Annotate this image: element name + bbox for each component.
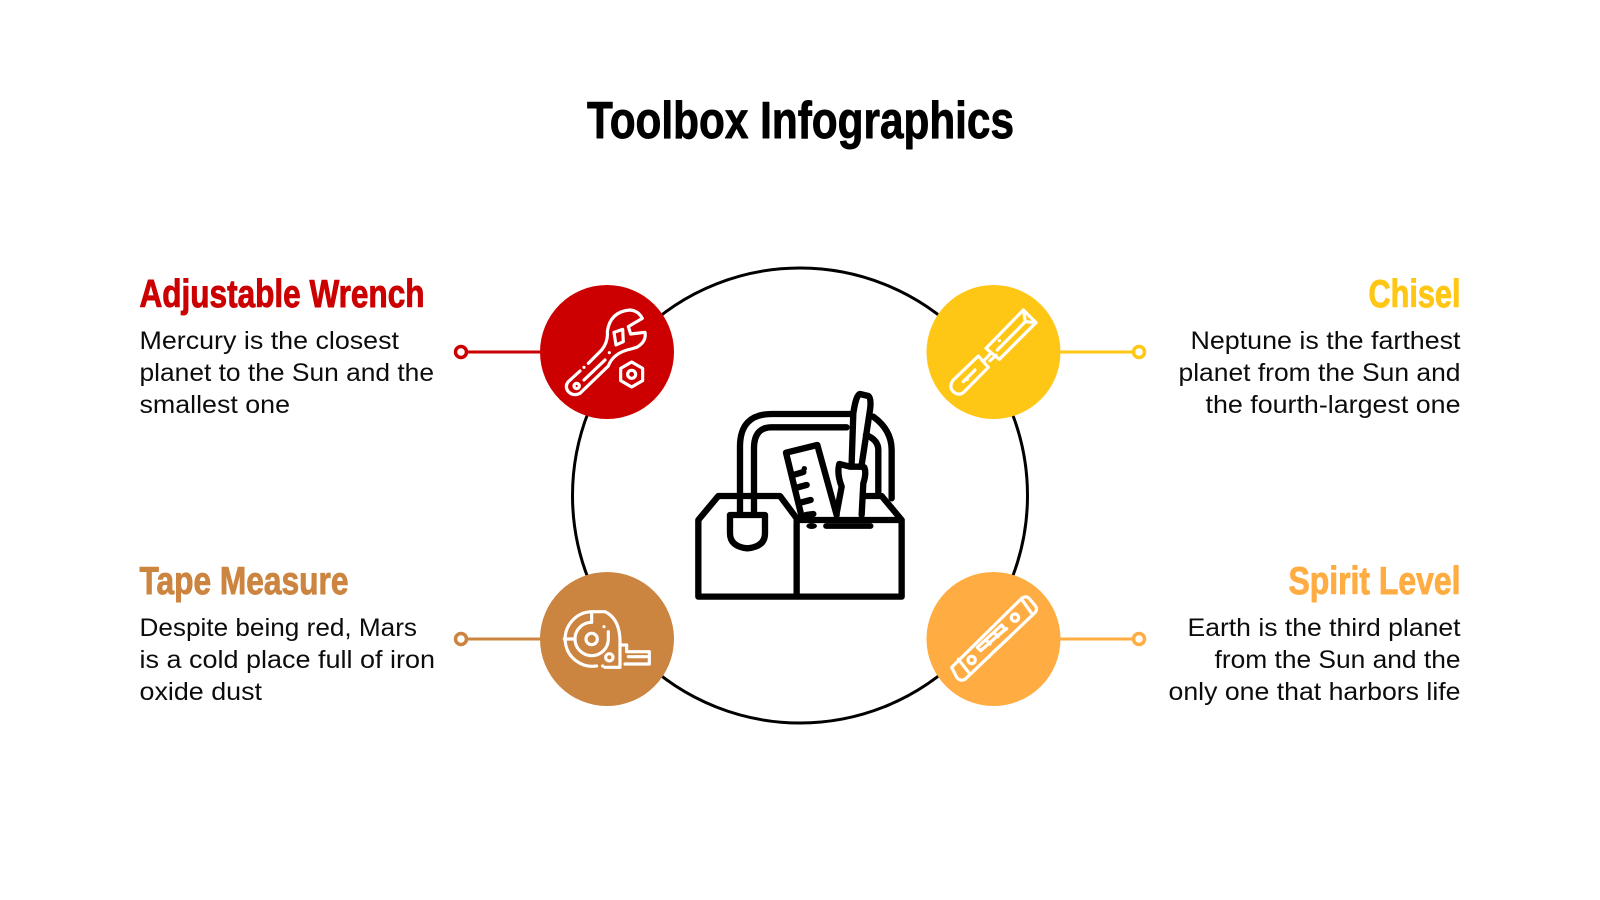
icon circle: wrench (540, 285, 674, 419)
text: wrench description: smallest one (140, 391, 290, 419)
text: spirit level description: only one that harbors life (1168, 678, 1460, 706)
icon circle: tape measure (540, 572, 674, 706)
text: tape measure description: oxide dust (140, 678, 262, 706)
connector: wrench (456, 346, 541, 358)
icon circle: spirit level (926, 572, 1060, 706)
connector: chisel (1059, 346, 1144, 358)
heading: tape measure: Tape Measure (140, 560, 348, 603)
panel: adjustable wrench (140, 273, 674, 419)
icon: toolbox (698, 394, 902, 597)
text: tape measure description: is a cold place full of iron (140, 646, 435, 674)
text: wrench description (140, 327, 434, 419)
text: spirit level description (1168, 614, 1461, 706)
icon circle: chisel (926, 285, 1060, 419)
central ring (572, 268, 1028, 723)
text: wrench description: Mercury is the closest (140, 327, 399, 355)
heading: chisel: Chisel (1368, 273, 1460, 316)
panel: chisel (926, 273, 1461, 419)
panel: tape measure (140, 560, 674, 706)
heading: adjustable wrench: Adjustable Wrench (140, 273, 424, 316)
text: spirit level description: Earth is the third planet (1188, 614, 1461, 642)
text: chisel description: Neptune is the farthest (1190, 327, 1461, 355)
text: tape measure description: Despite being red, Mars (140, 614, 417, 642)
text: chisel description (1178, 327, 1461, 419)
text: chisel description: the fourth-largest one (1206, 391, 1460, 419)
text: spirit level description: from the Sun and the (1214, 646, 1460, 674)
heading: spirit level: Spirit Level (1288, 560, 1460, 603)
connector: spirit level (1059, 634, 1144, 644)
text: wrench description: planet to the Sun and the (140, 359, 434, 387)
text: chisel description: planet from the Sun and (1178, 359, 1460, 387)
title: Toolbox Infographics (587, 92, 1014, 150)
connector: tape measure (456, 634, 541, 644)
panel: spirit level (926, 560, 1461, 706)
text: tape measure description (140, 614, 435, 706)
